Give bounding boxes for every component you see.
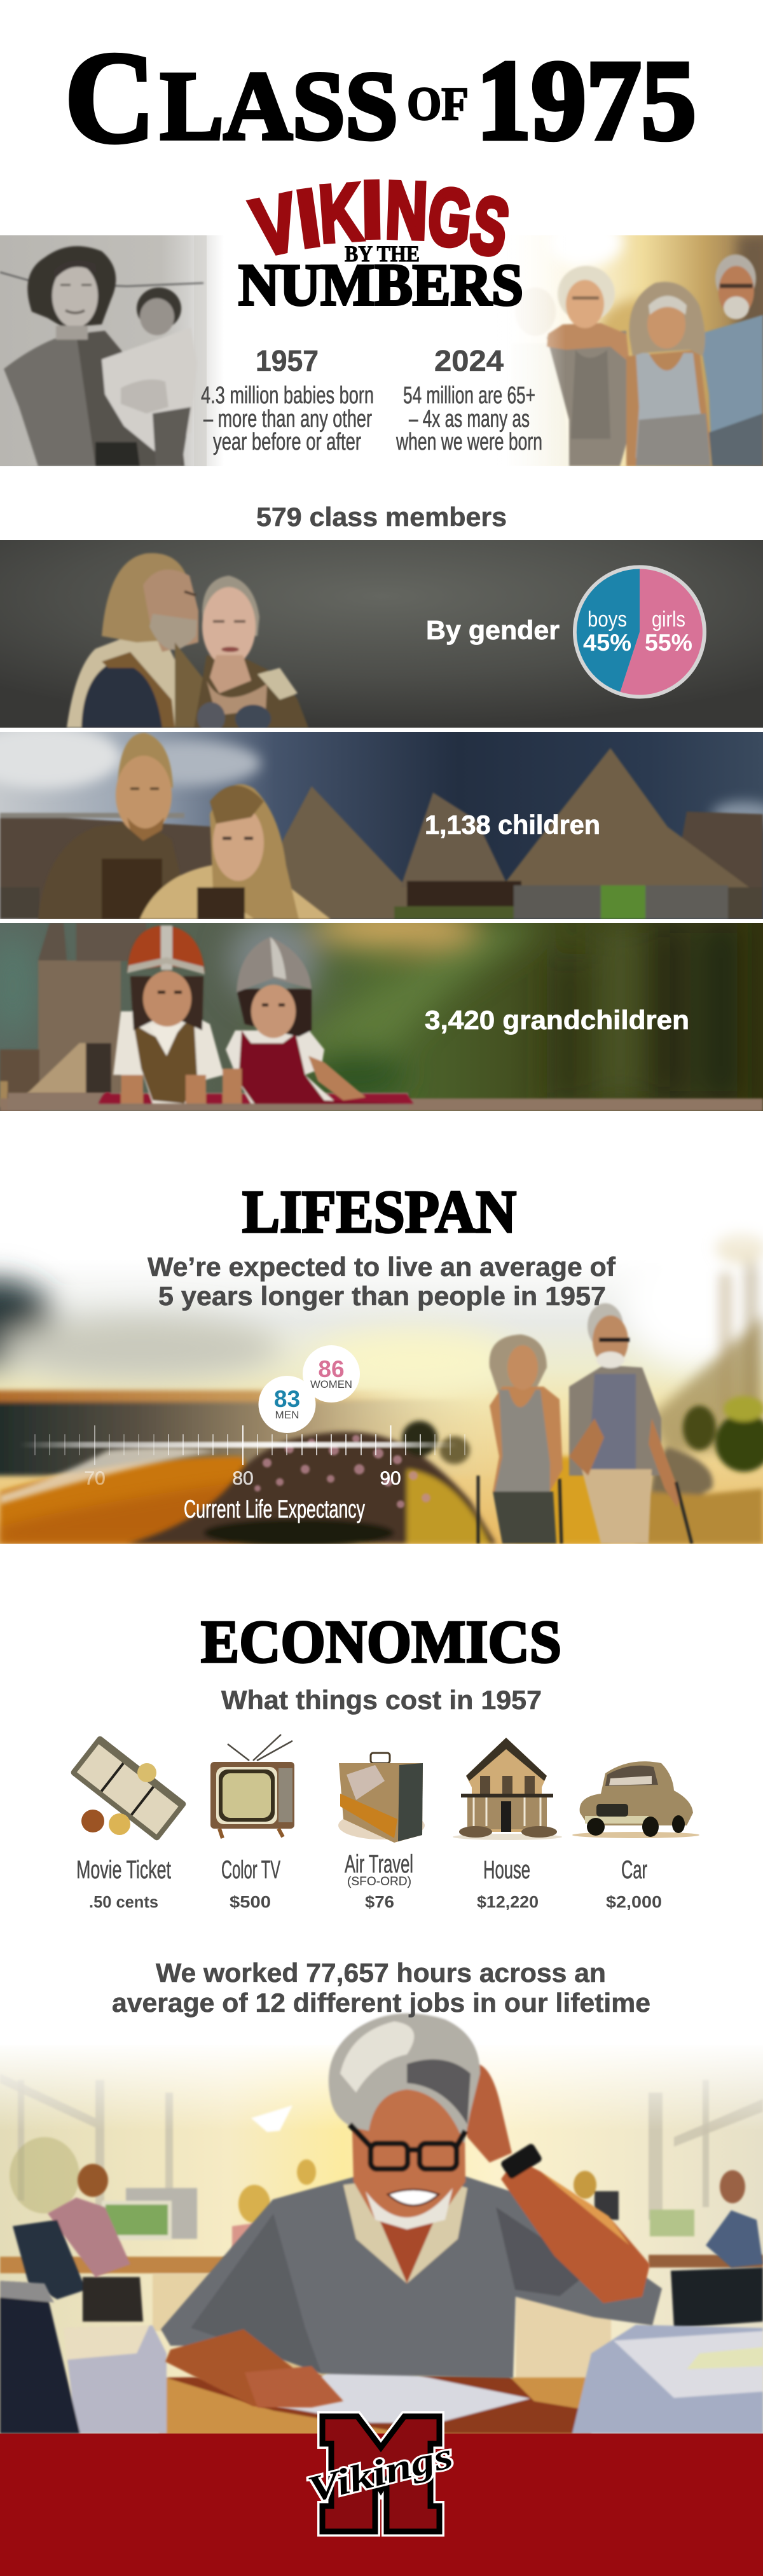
panel: lifespan beach scene	[0, 1208, 763, 1547]
chart: life expectancy ruler: 80	[232, 1468, 254, 1489]
item labels and prices: Movie Ticket	[76, 1856, 171, 1884]
label: 3,420 grandchildren: 3,420 grandchildren	[425, 1005, 689, 1035]
text: work statement	[112, 1958, 650, 2018]
chart: life expectancy ruler	[19, 1425, 465, 1489]
arched word: Vikings: V	[245, 177, 306, 274]
arched word: Vikings: I	[361, 165, 383, 255]
heading: Vikings by the Numbers	[238, 165, 523, 318]
icon: movie ticket and coins	[70, 1735, 187, 1841]
image: jogging couple	[478, 1303, 692, 1544]
title: Class of 1975: LASS	[160, 52, 398, 160]
arched word: Vikings: I	[292, 173, 325, 265]
image: two children in viking helmets	[99, 925, 413, 1104]
heading: Lifespan: LIFESPAN	[242, 1178, 516, 1245]
image: palm promenade	[515, 1231, 763, 1544]
item labels and prices: Color TV	[221, 1856, 280, 1884]
heading: Vikings by the Numbers: NUMBERS	[238, 253, 523, 318]
text: work statement: We worked 77,657 hours across an	[156, 1958, 606, 1988]
logo: M Vikings: Vikings	[303, 2434, 457, 2510]
panel: by gender	[0, 540, 763, 733]
item labels and prices: .50 cents	[89, 1892, 158, 1911]
title: Class of 1975: 1975	[476, 37, 696, 163]
text: 2024 stat: 2024	[434, 344, 504, 377]
panel: grandchildren	[0, 907, 763, 1113]
text: lifespan statement: We’re expected to live an average of	[148, 1252, 616, 1282]
image: desk and papers	[0, 2281, 763, 2435]
icon: house	[453, 1738, 562, 1840]
image: viking village huts	[0, 748, 763, 919]
item labels and prices: Air Travel	[345, 1850, 413, 1878]
panel: office illustration	[0, 2013, 763, 2435]
text: 2024 stat	[395, 350, 542, 450]
footer band	[0, 2434, 763, 2576]
label: by gender: By gender	[426, 615, 560, 645]
text: 1957 stat: 1957	[256, 344, 319, 377]
chart: life expectancy ruler: 90	[380, 1468, 401, 1489]
image: left coworker	[13, 2164, 197, 2322]
panel: 1957 and 2024 photo band	[0, 216, 763, 466]
label: current life expectancy: Current Life Expectancy	[184, 1495, 365, 1523]
text: work statement: average of 12 different jobs in our lifetime	[112, 1988, 650, 2018]
icon: classic car	[572, 1761, 699, 1838]
image: older viking couple	[67, 553, 308, 733]
marker: men 83: 83	[274, 1386, 300, 1412]
marker: men 83	[258, 1376, 315, 1433]
text: 579 class members: 579 class members	[256, 502, 507, 532]
image: office background	[0, 2074, 763, 2379]
item labels and prices: Car	[621, 1856, 647, 1884]
item labels and prices: House	[483, 1856, 530, 1884]
text: lifespan statement: 5 years longer than people in 1957	[158, 1281, 606, 1311]
item labels and prices	[76, 1850, 662, 1911]
image: stone ledge	[0, 1093, 763, 1111]
item labels and prices: $12,220	[477, 1892, 539, 1911]
text: 1957 stat: year before or after	[213, 429, 361, 455]
arched word: Vikings: N	[384, 165, 429, 256]
title: Class of 1975	[65, 25, 696, 170]
text: 1957 stat: 4.3 million babies born	[201, 382, 374, 409]
title: Class of 1975: C	[65, 25, 155, 170]
chart: life expectancy ruler: 70	[84, 1468, 106, 1489]
text: 2024 stat: – 4x as many as	[409, 406, 530, 433]
image: castle	[0, 923, 146, 1113]
pie chart: boys 45 percent, girls 55 percent: girls	[652, 607, 685, 632]
marker: men 83: MEN	[275, 1409, 299, 1421]
pie chart: boys 45 percent, girls 55 percent: 55%	[645, 630, 692, 656]
text: 1957 stat	[201, 344, 374, 455]
arched word: Vikings: K	[316, 168, 364, 260]
text: 2024 stat: 54 million are 65+	[403, 382, 535, 409]
item labels and prices: (SFO-ORD)	[347, 1875, 411, 1888]
image: sea and beach	[0, 1390, 509, 1544]
pie chart: boys 45 percent, girls 55 percent: 45%	[583, 630, 631, 656]
icon: vintage television	[210, 1735, 294, 1838]
image: right coworker	[574, 2170, 763, 2328]
arched word: Vikings: G	[424, 170, 476, 264]
pie chart: boys 45 percent, girls 55 percent	[573, 565, 706, 698]
image: young viking man and woman	[38, 733, 331, 919]
photo: active seniors 2024	[517, 235, 763, 466]
arched word: Vikings	[245, 165, 516, 274]
marker: women 86: WOMEN	[310, 1378, 352, 1390]
pie chart: boys 45 percent, girls 55 percent: boys	[588, 607, 627, 632]
heading: Vikings by the Numbers: BY THE	[345, 241, 420, 267]
heading: Economics: ECONOMICS	[201, 1608, 561, 1675]
item labels and prices: $500	[230, 1892, 271, 1911]
text: 2024 stat: when we were born	[395, 429, 542, 455]
text: lifespan statement	[148, 1252, 616, 1311]
arched word: Vikings: S	[464, 178, 516, 274]
text: 1957 stat: – more than any other	[203, 406, 372, 433]
label: 1,138 children: 1,138 children	[425, 810, 600, 840]
marker: women 86	[303, 1345, 360, 1402]
title: Class of 1975: OF	[407, 78, 469, 130]
image: laughing man at desk	[161, 2013, 662, 2407]
image: flowering bush	[127, 1421, 496, 1547]
panel: children	[0, 725, 763, 919]
photo: mother and baby 1957	[0, 235, 224, 466]
subheading: what things cost: What things cost in 1957	[221, 1685, 542, 1715]
marker: women 86: 86	[318, 1356, 345, 1382]
item labels and prices: $2,000	[606, 1892, 662, 1911]
icon: suitcase	[338, 1753, 425, 1843]
item labels and prices: $76	[365, 1892, 394, 1911]
logo: M Vikings	[303, 2416, 457, 2531]
